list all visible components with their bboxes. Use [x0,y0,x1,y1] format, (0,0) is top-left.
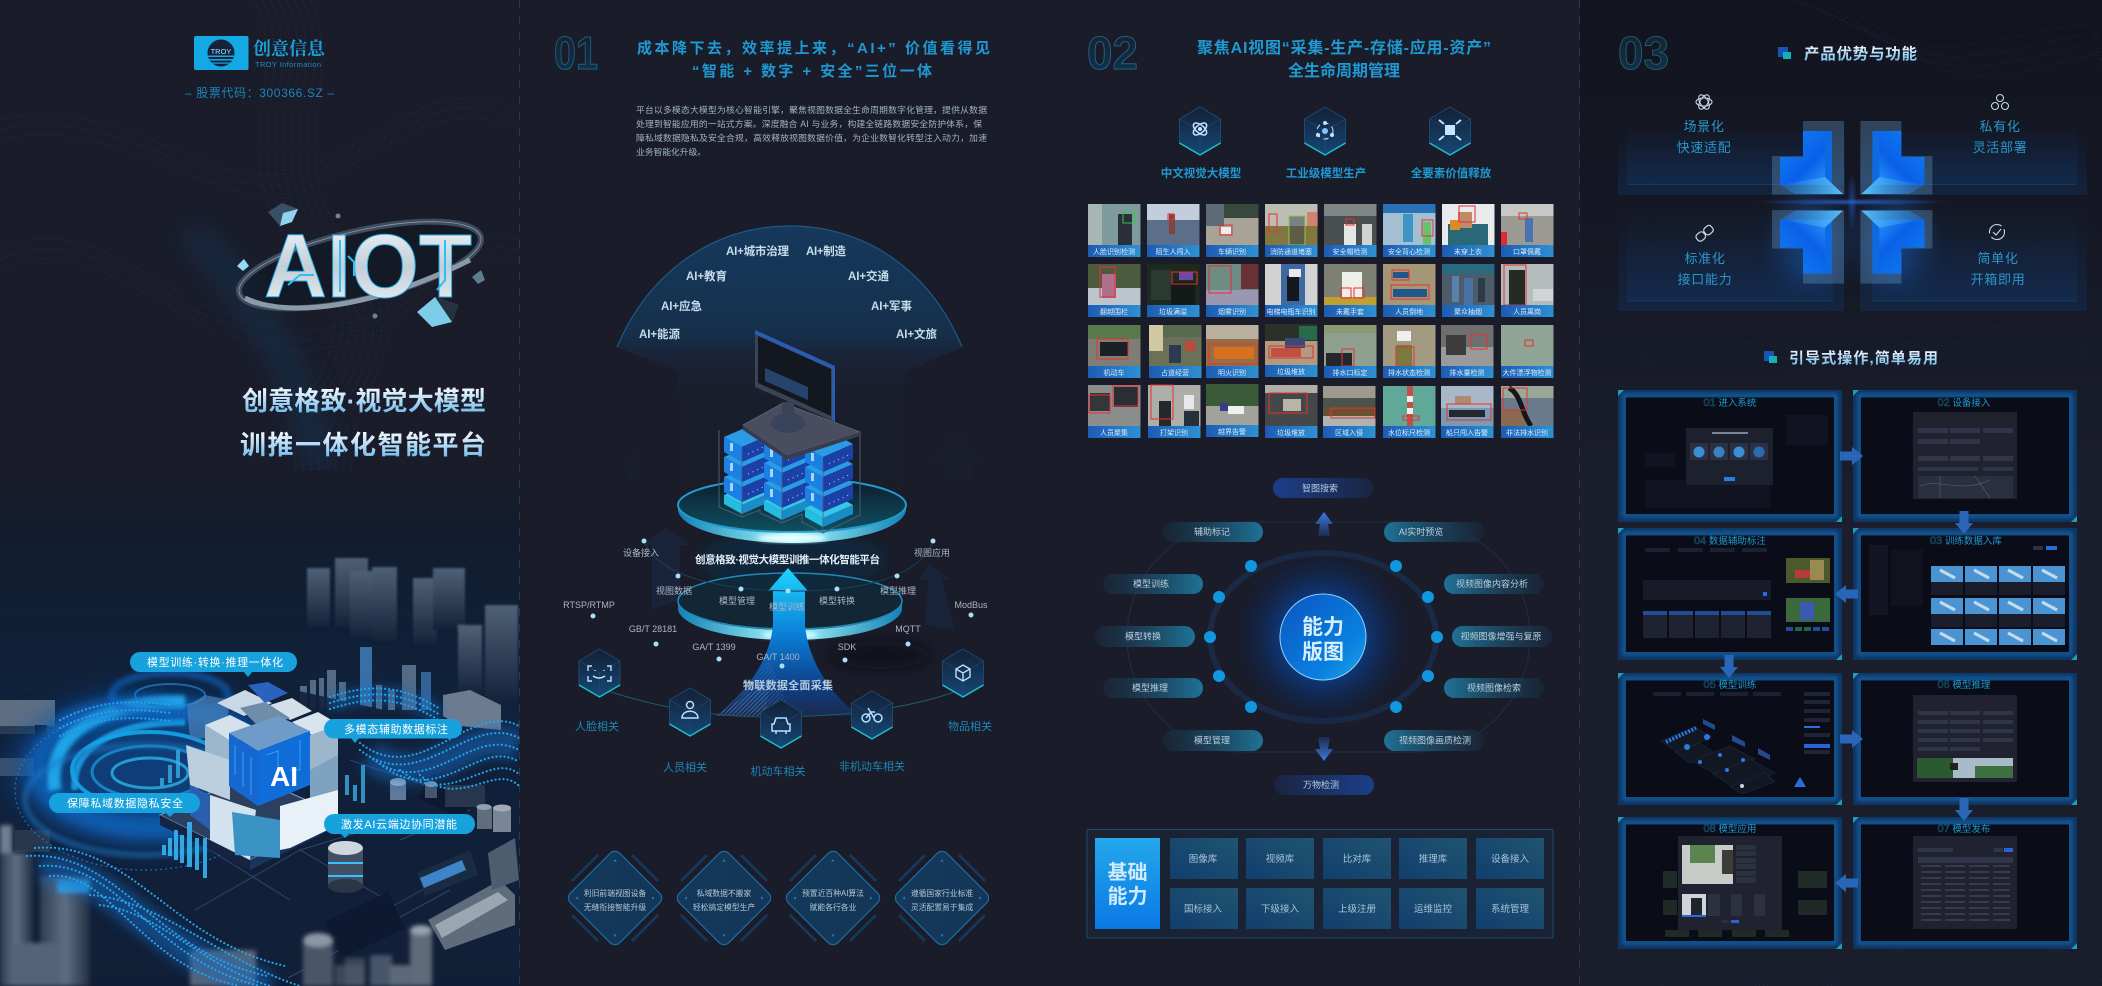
intro text: 处理到智能应用的一站式方案。深度融合 AI 与业务，构建全链路数据安全防护体系，保 [636,118,982,129]
category labels: 人员相关 [663,760,707,774]
base capability cells: 视频库 [1266,853,1295,865]
glass cubes [186,682,340,860]
diamond: algorithms: 赋能各行各业 [810,902,857,912]
distant city [307,558,518,703]
circuit board [0,660,519,986]
callout: annotation: 多模态辅助数据标注 [344,722,448,736]
base capability cells: 上级注册 [1338,903,1376,915]
image grid: detection samples: 安全帽检测 [1332,247,1368,256]
background wave pattern [1640,0,2102,986]
node labels and dots: RTSP/RTMP [563,600,615,610]
screen 07 model release [1853,817,2077,949]
core badge [1233,547,1413,727]
foreground blurred parts [0,825,432,986]
advantage: simple [1971,224,2025,287]
advantage: standard [1678,224,1732,287]
heading: advantages: 产品优势与功能 [1804,44,1917,63]
image grid: detection samples: 未戴手套 [1336,307,1364,316]
diamond: private data: 轻松搞定模型生产 [693,902,755,912]
base capability cells: 图像库 [1189,853,1218,865]
faint side arrows [618,430,985,630]
base capability cells: 推理库 [1419,853,1448,865]
diamond: standards: 灵活配置易于集成 [911,902,973,912]
image grid: detection samples: 越界告警 [1218,427,1246,436]
advantage: standard: 标准化 [1684,251,1726,266]
screen 01 enter system: 01 进入系统 [1704,397,1757,409]
diamond: algorithms: 预置近百种AI算法 [802,888,864,898]
image grid: detection samples: 垃圾满溢 [1159,307,1187,316]
background glow [190,230,320,470]
screen 06 model inference [1853,673,2077,805]
capability pills: 辅助标记 [1194,526,1230,537]
category labels: 物品相关 [948,719,992,733]
callout: privacy: 保障私域数据隐私安全 [67,796,183,810]
image grid: detection samples: 陌生人闯入 [1156,247,1190,256]
image grid: detection samples: 垃圾堆放 [1277,367,1305,376]
diamond: algorithms [784,849,882,947]
screen 08 model application: 08 模型应用 [1704,823,1756,835]
screen 03 training data: 03 训练数据入库 [1930,535,2002,547]
icon: bicycle [852,691,892,739]
intro text: 障私域数据隐私及安全合规，高效释放视图数据价值，为企业数智化转型注入动力，加速 [636,132,987,143]
advantage: private: 私有化 [1979,119,2021,134]
screen 04 data annotation [1618,528,1842,660]
ring dots [1204,560,1443,713]
image grid: detection samples: 非法排水识别 [1506,428,1548,437]
category labels: 机动车相关 [750,764,806,778]
image grid: detection samples: 机动车 [1104,368,1124,377]
base capability cells: 系统管理 [1491,903,1529,915]
intro text [636,104,987,157]
monitor [743,330,860,460]
panel: cover [0,0,519,986]
dome of AI+ scenarios: AI+城市治理 [726,244,790,258]
capability pills: 视频图像检索 [1467,682,1521,693]
node labels and dots: 模型推理 [880,585,916,596]
capability pills: AI实时预览 [1399,526,1443,537]
advantage: scenario: 场景化 [1683,119,1725,134]
bar charts [160,750,365,878]
dome of AI+ scenarios: AI+交通 [848,269,890,283]
core badge: 版图 [1302,641,1344,664]
category labels: 非机动车相关 [839,759,905,773]
feature: value release: 全要素价值释放 [1411,166,1492,180]
main title [240,386,486,460]
logo: TROY [211,47,231,56]
advantage: simple: 简单化 [1977,251,2019,266]
core badge: 能力 [1302,616,1344,639]
feature: industrial model production: 工业级模型生产 [1286,166,1366,180]
image grid: detection samples: 车辆识别 [1218,247,1246,256]
capability pills: 模型转换 [1125,630,1161,642]
dome of AI+ scenarios: AI+文旅 [896,327,938,341]
heading 02: 全生命周期管理 [1288,61,1400,80]
advantage: standard: 接口能力 [1678,272,1732,287]
heading 01: 成本降下去，效率提上来，“AI+” 价值看得见 [637,39,990,57]
outer and inner rings [1127,522,1530,752]
image grid: detection samples: 聚众抽烟 [1454,307,1482,316]
section number 03: 03 [1618,27,1669,79]
small city [300,647,431,710]
image grid: detection samples: 人员离岗 [1513,307,1541,316]
screen 07 model release: 07 模型发布 [1938,823,1990,835]
heading 01: “智能 + 数字 + 安全”三位一体 [692,62,932,80]
feature: value release [1411,107,1492,180]
heading 02 [1197,38,1491,80]
base capability cells: 设备接入 [1491,853,1529,865]
logo [194,35,326,70]
blue data swirl [10,673,290,870]
capability pills: 模型推理 [1132,682,1168,693]
node labels and dots: MQTT [895,624,921,634]
image grid: detection samples: 消防通道堵塞 [1270,247,1312,256]
screen 01 enter system [1618,390,1842,522]
capability pills: 视频图像内容分析 [1456,578,1528,589]
database cylinder [328,841,363,893]
capability map [1095,478,1552,795]
image grid: detection samples: 人脸识别检测 [1093,247,1135,256]
section number 01: 01 [554,27,598,79]
base capability badge [1095,838,1160,929]
image grid: detection samples: 安全背心检测 [1388,247,1430,256]
heading: guided operation: 引导式操作,简单易用 [1789,349,1938,367]
image grid: detection samples: 排水口标定 [1332,368,1368,377]
section number 02: 02 [1087,27,1138,79]
arrow up [1315,512,1333,536]
image grid: detection samples [1088,204,1554,438]
screen 03 training data [1853,528,2077,660]
image grid: detection samples: 打架识别 [1160,428,1188,437]
feature: industrial model production [1286,107,1366,180]
screen 08 model application [1618,817,1842,949]
arrow: step 7 to 8 [1835,874,1858,892]
diamond: standards: 遵循国家行业标准 [911,888,973,898]
feature: Chinese vision model: 中文视觉大模型 [1161,166,1241,180]
screen 02 device access [1853,390,2077,522]
icon: face [579,649,620,697]
logo: 创意信息 [253,35,326,61]
capability pills: 视频图像画质检测 [1399,734,1471,746]
arrow down [1315,737,1333,761]
node labels and dots [563,538,988,692]
arrow: step 1 to 2 [1840,447,1863,465]
dome of AI+ scenarios: AI+教育 [686,269,727,283]
callout: annotation [324,719,462,743]
image grid: detection samples: 烟雾识别 [1218,307,1246,316]
image grid: detection samples: 翻越围栏 [1100,307,1128,316]
dome of AI+ scenarios: AI+应急 [661,299,702,313]
screen 05 model training [1618,673,1842,805]
intro text: 业务智能化升级。 [636,146,706,157]
advantage: scenario: 快速适配 [1677,140,1731,155]
diamond: reuse devices [566,849,664,947]
lower disc [678,573,930,669]
stock code: – 股票代码：300366.SZ – [185,86,334,100]
base capability cells: 比对库 [1343,853,1372,865]
AI cube [229,716,310,806]
callout: cloud edge [324,814,475,838]
arrow: step 2 to 3 [1955,511,1973,534]
node labels and dots: 物联数据全面采集 [743,678,833,692]
heading 02: 聚焦AI视图“采集-生产-存储-应用-资产” [1197,38,1491,57]
callout: training [130,652,297,677]
arrow: step 4 to 5 [1720,655,1738,678]
AI cube: AI [270,761,298,792]
panel dividers [520,0,1580,986]
screen 06 model inference: 06 模型推理 [1938,679,1991,691]
arrow: step 3 to 4 [1835,585,1858,603]
background wave pattern [0,0,519,520]
main title: 创意格致·视觉大模型 [242,386,486,416]
category labels: 人脸相关 [575,719,619,733]
illustration: AI chip city scene [0,470,519,986]
image grid: detection samples: 人员倒地 [1395,307,1423,316]
panel: 03 advantages and workflow [1580,0,2102,986]
node labels and dots: 设备接入 [623,547,659,558]
panel: 02 lifecycle [1087,27,1554,938]
panel: 01 platform [554,27,992,947]
base capability badge: 能力 [1108,885,1148,908]
node labels and dots: 模型转换 [819,595,855,606]
callout: cloud edge: 激发AI云端边协同潜能 [341,817,457,831]
advantage panels [1618,120,2087,311]
dome of AI+ scenarios: AI+能源 [639,327,680,341]
diamond: standards [893,849,991,947]
node labels and dots: GA/T 1400 [756,652,800,662]
diamond: private data [675,849,773,947]
base capability badge: 基础 [1108,861,1148,884]
base capability cells: 下级接入 [1261,903,1299,915]
icon: item [942,649,984,697]
image grid: detection samples: 垃圾堆放 [1277,428,1305,437]
node labels and dots: GB/T 28181 [629,624,677,634]
dome of AI+ scenarios [617,226,962,520]
heading 01 [637,39,990,80]
image grid: detection samples: 电梯电瓶车识别 [1266,307,1316,316]
image grid: detection samples: 排水量检测 [1450,368,1484,377]
image grid: detection samples: 占道经营 [1161,368,1189,377]
base capability cells: 国标接入 [1184,903,1222,915]
capability pills: 智图搜索 [1302,482,1338,494]
logo: TROY Information [255,60,321,69]
image grid: detection samples: 排水状态检测 [1388,368,1430,377]
base capability cells: 运维监控 [1414,903,1452,915]
screen 04 data annotation: 04 数据辅助标注 [1694,535,1766,547]
image grid: detection samples: 人员聚集 [1100,428,1128,437]
image grid: detection samples: 明火识别 [1218,368,1246,377]
particle waves [27,688,519,986]
icon: car [760,700,802,748]
upper disc [678,478,906,590]
feature: Chinese vision model [1161,107,1241,180]
platform label: 创意格致·视觉大模型训推一体化智能平台 [695,553,880,566]
node labels and dots: 视图应用 [914,547,950,558]
node labels and dots: GA/T 1399 [692,642,736,652]
base capability cells [1170,838,1544,929]
node labels and dots: 模型训练 [769,601,805,612]
server stacks [719,424,860,533]
image grid: detection samples: 区域入侵 [1335,428,1363,437]
central cross graphic [1757,121,1947,284]
image grid: detection samples: 水位标尺检测 [1388,428,1430,437]
chips [0,690,519,950]
arrow: step 6 to 7 [1955,798,1973,821]
data arcs [605,541,960,717]
image grid: detection samples: 船只闯入告警 [1446,428,1488,437]
capability pills: 模型管理 [1194,734,1230,746]
capability pills [1095,478,1552,795]
callout: training: 模型训练·转换·推理一体化 [147,655,283,669]
node labels and dots: 模型管理 [719,595,755,606]
node labels and dots: 视图数据 [656,585,692,596]
AIOT logo: AIOT [264,217,472,317]
capability pills: 模型训练 [1133,578,1169,589]
main title: 训推一体化智能平台 [240,430,486,460]
AIOT logo [232,203,488,327]
node labels and dots: ModBus [954,600,988,610]
node labels and dots: SDK [838,642,856,652]
dome of AI+ scenarios: AI+军事 [871,299,912,313]
diamond: reuse devices: 无缝衔接智能升级 [584,902,646,912]
image grid: detection samples: 口罩佩戴 [1513,247,1541,256]
capability pills: 万物检测 [1303,779,1339,790]
base plate [159,786,339,860]
base capability table [1087,830,1553,938]
diamond: private data: 私域数据不搬家 [697,888,751,898]
advantage: scenario [1677,93,1731,155]
diamond: reuse devices: 利旧前端视图设备 [584,888,646,898]
image grid: detection samples: 大件漂浮物检测 [1502,368,1552,377]
dome of AI+ scenarios: AI+制造 [806,244,846,258]
advantage: private [1973,94,2027,155]
category labels [575,719,992,778]
icon: person [670,688,710,736]
intro text: 平台以多模态大模型为核心智能引擎，聚焦视图数据全生命周期数字化管理，提供从数据 [636,104,987,115]
advantage: simple: 开箱即用 [1971,272,2025,287]
image grid: detection samples: 未穿上衣 [1454,247,1482,256]
callout: privacy [49,793,200,817]
screen 05 model training: 05 模型训练 [1704,679,1757,691]
screen 02 device access: 02 设备接入 [1938,397,1991,409]
advantage: private: 灵活部署 [1973,140,2027,155]
central upward arrow [715,568,860,716]
capability pills: 视频图像增强与复原 [1460,630,1542,642]
capacitors [390,778,511,832]
arrow: step 5 to 6 [1840,730,1863,748]
